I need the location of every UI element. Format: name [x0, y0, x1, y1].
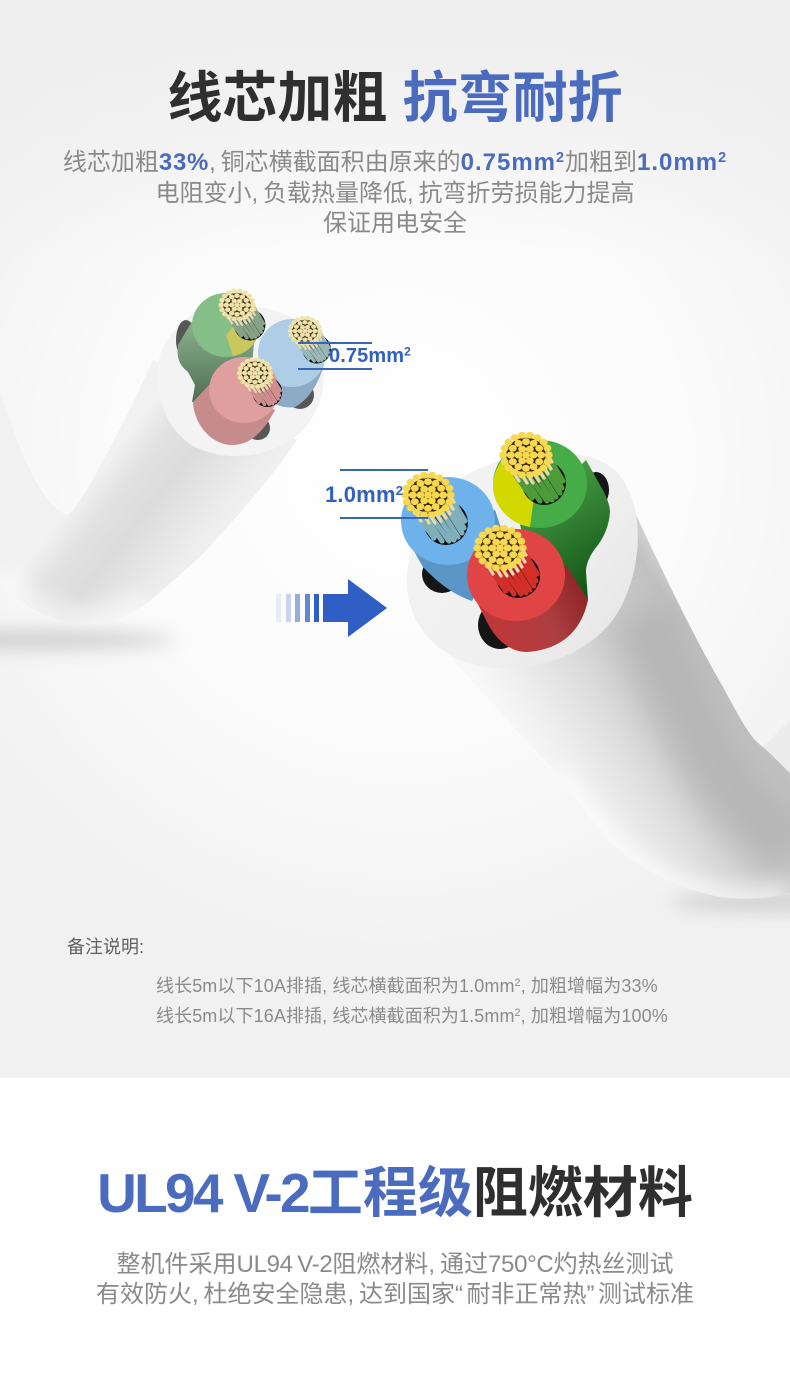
small sheath face: [157, 305, 324, 456]
large core: red: [467, 525, 588, 652]
floor shadow: left: [0, 631, 175, 649]
title: flame-retardant material: UL94 V-2工程级阻燃材料: [97, 1162, 693, 1224]
floor shadow: right: [670, 895, 790, 909]
flame-retardant text: 有效防火, 杜绝安全隐患, 达到国家“耐非正常热”测试标准: [96, 1281, 694, 1308]
title: thicker core: 线芯加粗 抗弯耐折: [167, 67, 623, 129]
large cable cavity: [422, 472, 609, 649]
small cable cavity: [176, 320, 314, 440]
notes body: [156, 976, 668, 1026]
intro text: 电阻变小, 负载热量降低, 抗弯折劳损能力提高: [155, 180, 635, 206]
small core: green-yellow: [177, 289, 265, 402]
intro text: [63, 149, 727, 237]
large sheath face: [407, 453, 638, 668]
large cable body: [488, 516, 790, 898]
label: 1.0mm²: 1.0mm2: [325, 482, 403, 507]
intro text: 线芯加粗33%, 铜芯横截面积由原来的0.75mm2加粗到1.0mm2: [63, 149, 727, 176]
large cable cross-section (1.0mm²): [401, 432, 638, 668]
small core: red: [193, 357, 282, 445]
illustration: cable comparison on grey backdrop: [0, 0, 790, 1078]
dimension lines: 1.0mm²: [340, 469, 428, 519]
large cable, strand behind: [763, 720, 790, 790]
notes body: 线长5m以下16A排插, 线芯横截面积为1.5mm2, 加粗增幅为100%: [156, 1006, 668, 1026]
small core: blue: [258, 316, 331, 408]
arrow: blue fading stripes and head: [276, 579, 387, 637]
flame-retardant text: [96, 1251, 694, 1308]
notes body: 线长5m以下10A排插, 线芯横截面积为1.0mm2, 加粗增幅为33%: [156, 976, 658, 996]
flame-retardant text: 整机件采用UL94 V-2阻燃材料, 通过750°C灼热丝测试: [117, 1251, 673, 1278]
large core: green-yellow: [493, 432, 610, 600]
intro text: 保证用电安全: [323, 210, 467, 237]
large core: blue: [401, 472, 505, 601]
small cable body: [28, 360, 296, 617]
small cable cross-section (0.75mm²): [157, 289, 331, 456]
dimension lines: 0.75mm²: [298, 342, 372, 370]
notes heading: 备注说明:: [67, 937, 144, 957]
label: 0.75mm²: 0.75mm2: [329, 344, 411, 367]
